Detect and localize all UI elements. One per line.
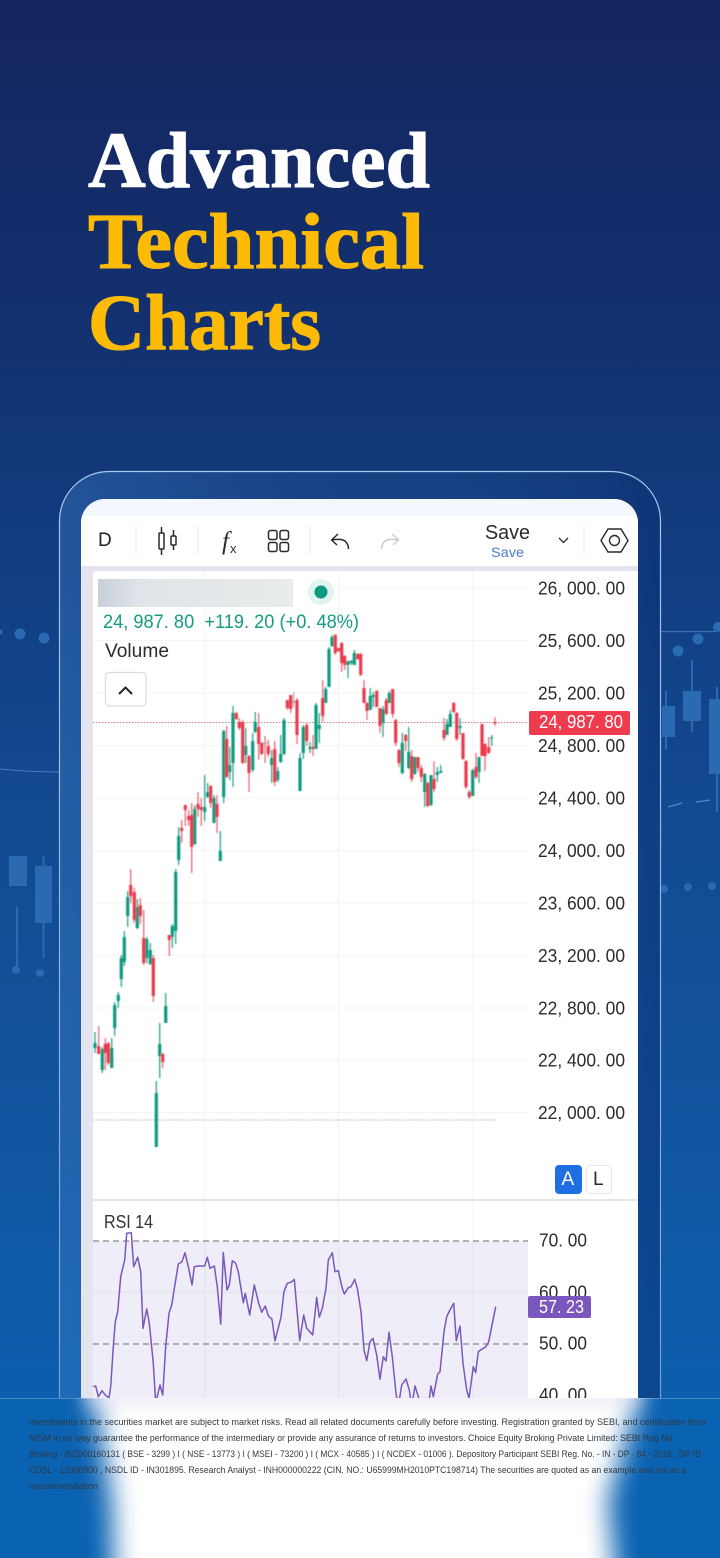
icon: indicators: x [230, 541, 237, 556]
price axis labels: 22, 400. 00 [538, 1050, 625, 1070]
live dot [308, 579, 334, 605]
price axis labels: 25, 200. 00 [538, 684, 625, 704]
RSI axis labels [539, 1230, 587, 1405]
interval label: D [98, 530, 112, 551]
icon: redo [382, 534, 398, 549]
RSI axis labels: 50. 00 [539, 1334, 587, 1354]
current price tag: 24, 987. 80 [539, 712, 623, 732]
title: Charts [88, 280, 321, 367]
price axis labels: 24, 800. 00 [538, 736, 625, 756]
grid lines [93, 571, 528, 1241]
icon: indicators: f [222, 528, 232, 555]
decorative candles left [0, 628, 59, 977]
icon: indicators [222, 531, 236, 554]
price axis labels: 23, 600. 00 [538, 894, 625, 914]
candlestick chart [95, 634, 495, 1147]
icon: candle type [159, 527, 176, 555]
icon: settings hexagon [601, 529, 628, 552]
price change: 24, 987. 80 +119. 20 (+0. 48%) [103, 612, 359, 633]
collapse button [106, 672, 146, 706]
icon: layouts [268, 530, 288, 552]
price axis labels: 24, 000. 00 [538, 841, 625, 861]
auto scale buttons: A [562, 1169, 574, 1190]
chart area frame [81, 566, 638, 1399]
base line [93, 1120, 496, 1121]
icon: chevron [559, 538, 568, 542]
price axis labels: 25, 600. 00 [538, 631, 625, 651]
price axis labels: 22, 800. 00 [538, 998, 625, 1018]
RSI value tag: 57. 23 [539, 1297, 584, 1317]
decorative candles right [660, 622, 720, 893]
app card [81, 499, 638, 1407]
toolbar [81, 516, 638, 557]
redacted symbol name [98, 579, 293, 607]
price axis labels: 26, 000. 00 [538, 578, 625, 598]
icon: undo [332, 534, 348, 549]
title: Advanced [88, 118, 430, 205]
save label: Save [485, 522, 530, 544]
price axis labels [538, 578, 625, 1123]
price axis labels: 24, 400. 00 [538, 788, 625, 808]
green bodies [95, 637, 492, 1147]
disclaimer text: NISM in no way guarantee the performance of the intermediary or provide any assurance of returns to investors. Choice Equity Broking Private Limited: SEBI Reg No. [29, 1433, 675, 1444]
disclaimer text [29, 1417, 706, 1492]
device frame [60, 472, 660, 1420]
red wicks [99, 634, 495, 1070]
RSI band [93, 1241, 528, 1399]
title [88, 118, 430, 367]
RSI axis labels: 70. 00 [539, 1230, 587, 1250]
RSI panel [93, 1212, 591, 1407]
red bodies [99, 635, 495, 1063]
disclaimer text: recommendation [29, 1481, 98, 1492]
RSI axis labels: 40. 00 [539, 1385, 587, 1405]
RSI line [93, 1233, 496, 1407]
auto scale buttons [555, 1165, 612, 1194]
volume label: Volume [105, 641, 169, 662]
RSI axis labels: 60. 00 [539, 1282, 587, 1302]
symbol header [98, 579, 359, 706]
grey doji wicks [262, 692, 297, 744]
green wicks [95, 635, 492, 1147]
status strip [81, 499, 638, 516]
price axis labels: 22, 000. 00 [538, 1103, 625, 1123]
RSI panel divider [93, 1199, 638, 1201]
disclaimer footer [0, 1398, 720, 1558]
RSI label: RSI 14 [104, 1212, 153, 1232]
title: Technical [88, 199, 424, 286]
save label: Save [491, 544, 524, 560]
auto scale buttons: L [593, 1169, 604, 1190]
price axis labels: 23, 200. 00 [538, 946, 625, 966]
price line [93, 722, 526, 723]
save label [486, 525, 530, 557]
